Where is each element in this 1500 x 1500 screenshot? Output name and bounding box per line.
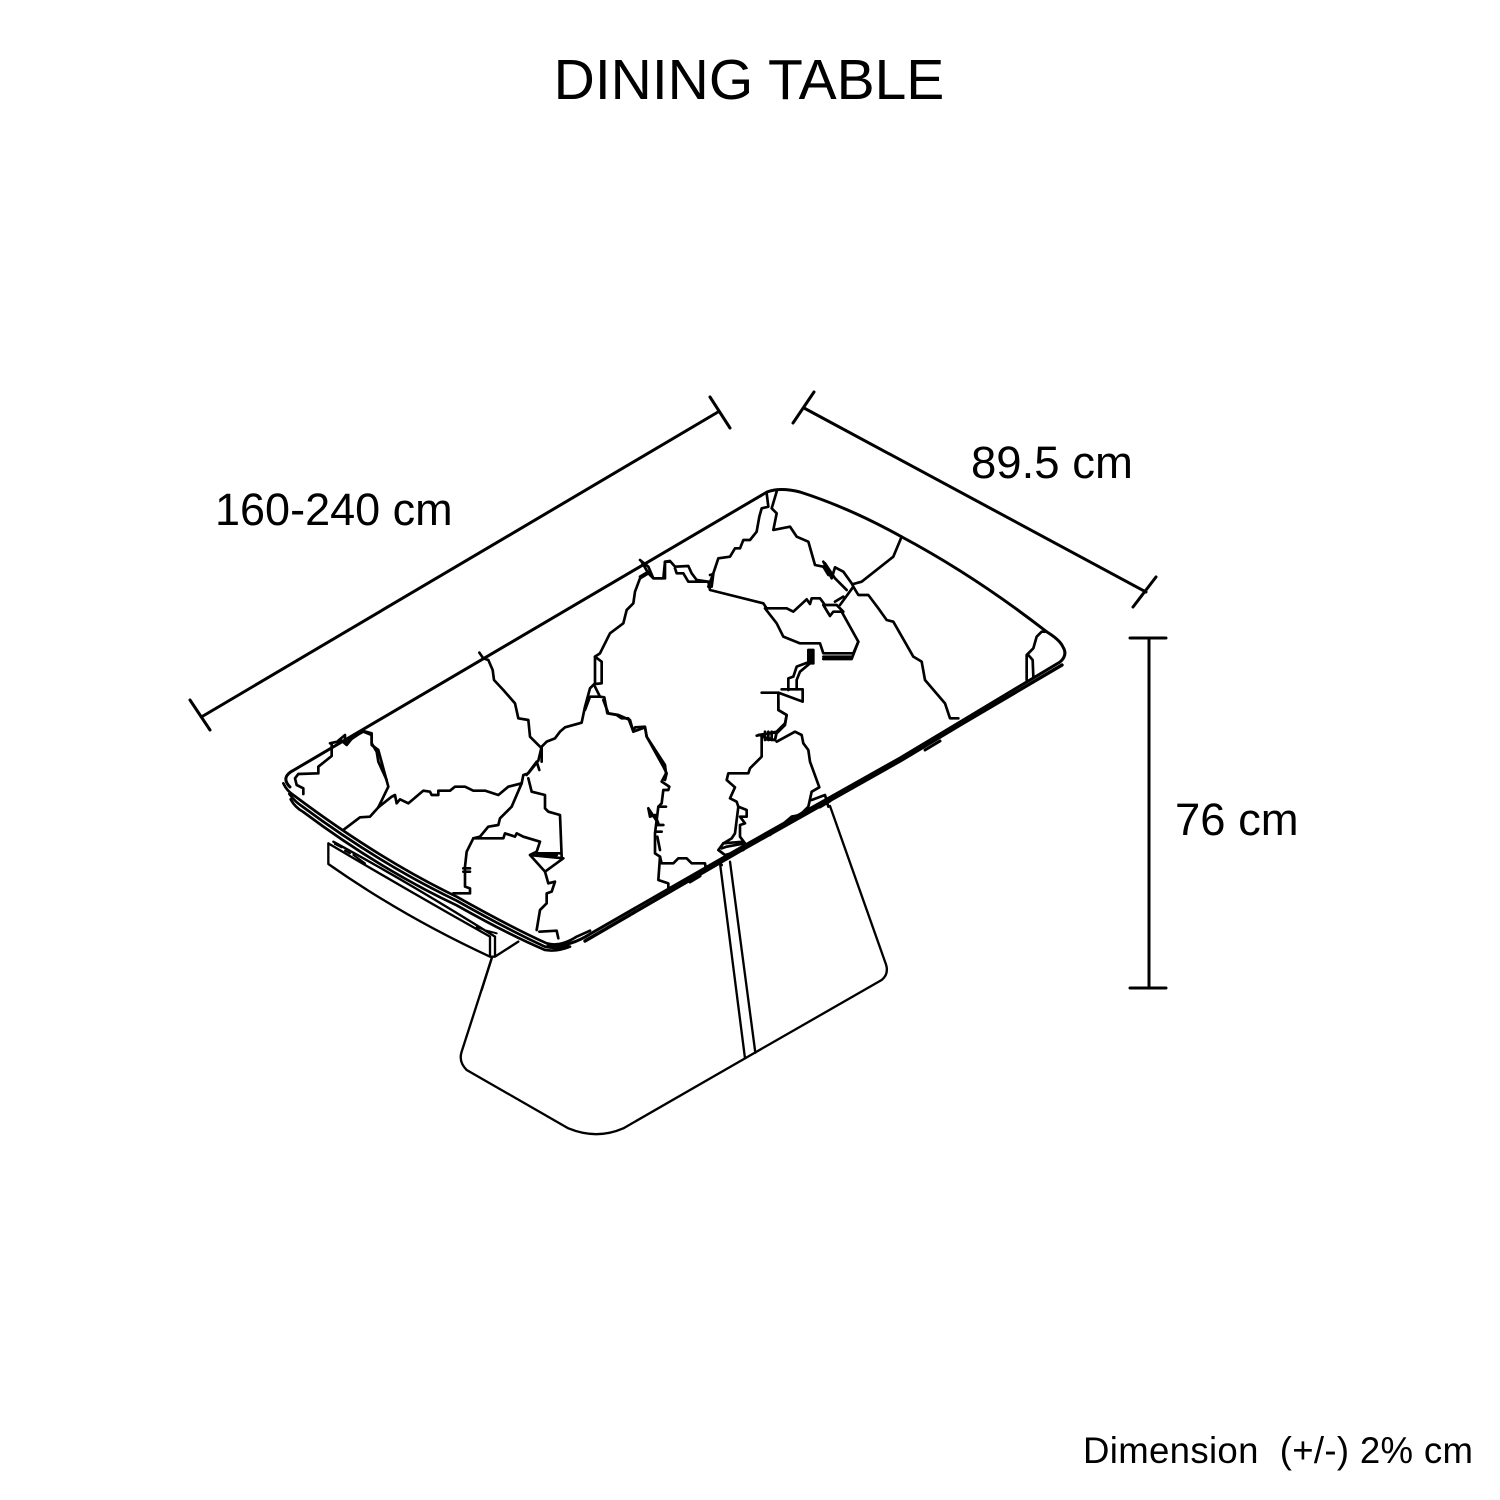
dimension: height arrow [1130,638,1166,988]
marble veins: upper right [640,492,1047,740]
dimension: length arrow [190,397,730,730]
marble veins: upper left [330,562,670,780]
extension apron [328,842,518,990]
pedestal base [461,806,887,1134]
marble veins: center section [603,700,828,888]
table top outline [286,490,1065,946]
dimension label: length: 160-240 cm [215,484,453,535]
title: DINING TABLE [554,48,944,112]
marble veins: left section [295,731,563,938]
dimension label: height: 76 cm [1175,794,1299,845]
dimension label: width: 89.5 cm [971,437,1133,488]
table top edge bands [283,783,590,951]
footnote: Dimension (+/-) 2% cm [1083,1430,1473,1471]
table top front edge band [585,665,1062,941]
table illustration [283,490,1065,1134]
dimension: width arrow [793,392,1156,607]
